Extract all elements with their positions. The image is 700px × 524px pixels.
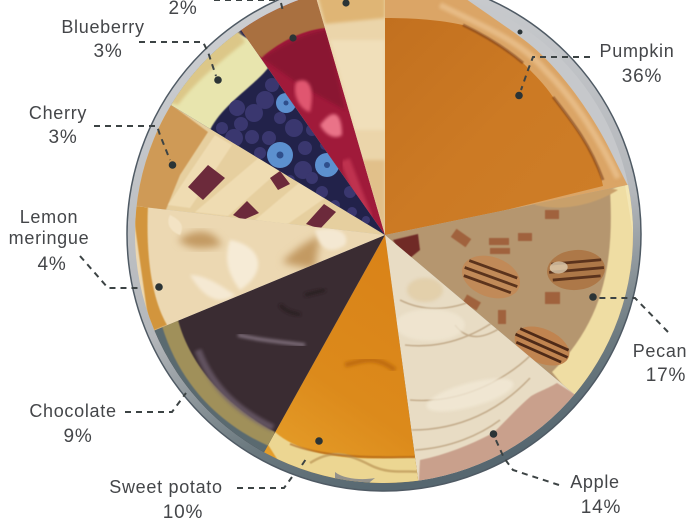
pecan nut 3 <box>514 326 570 366</box>
label: apple <box>490 430 621 518</box>
label: apple: Apple <box>570 472 620 492</box>
label: lemon meringue: Lemon <box>20 207 78 227</box>
label: blueberry: Blueberry <box>61 17 145 37</box>
label: chocolate <box>29 393 186 447</box>
cherry filling squares <box>188 165 336 229</box>
label: pumpkin: 36% <box>622 66 662 87</box>
slice: pecan <box>385 184 633 394</box>
pie tin rim <box>127 0 641 491</box>
pecan nut 2 <box>547 250 605 290</box>
label: lemon meringue <box>9 207 163 291</box>
pecan bits <box>451 210 560 324</box>
bright berries <box>267 93 339 177</box>
label: cherry: Cherry <box>29 103 87 123</box>
rim marker <box>518 30 522 34</box>
label: blueberry <box>61 17 222 84</box>
label: sweet potato: 10% <box>163 502 203 523</box>
label: 2% (cropped category) <box>168 0 297 42</box>
pecan nut 1 <box>462 256 520 298</box>
slice: apple <box>385 235 574 481</box>
label: apple: 14% <box>581 497 621 518</box>
label: pumpkin <box>515 41 674 99</box>
label: pecan: Pecan <box>633 341 687 361</box>
slice: pumpkin <box>385 0 628 235</box>
label: blueberry: 3% <box>93 41 123 62</box>
slice: blueberry <box>171 30 385 235</box>
slice: pastry crust <box>316 0 385 235</box>
label: chocolate: Chocolate <box>29 401 117 421</box>
blueberries <box>216 78 370 224</box>
lattice strips <box>168 135 325 226</box>
label: sweet potato <box>109 437 323 523</box>
label: cherry: 3% <box>48 127 78 148</box>
slice: lemon meringue <box>135 206 385 330</box>
label: sweet potato: Sweet potato <box>109 477 223 497</box>
label: pecan: 17% <box>646 365 686 386</box>
label: crust slice marker <box>342 0 350 7</box>
slice: chocolate <box>154 235 385 452</box>
slice: cherry lattice <box>136 105 384 235</box>
label: pecan <box>589 293 687 386</box>
pie chart <box>135 0 633 483</box>
label: cherry <box>29 103 176 169</box>
label: chocolate: 9% <box>63 426 93 447</box>
label: lemon meringue: 4% <box>37 254 67 275</box>
label: lemon meringue: meringue <box>9 228 89 248</box>
label: pumpkin: Pumpkin <box>600 41 674 61</box>
slice: raspberry <box>241 0 385 235</box>
slice: sweet potato <box>264 235 418 483</box>
